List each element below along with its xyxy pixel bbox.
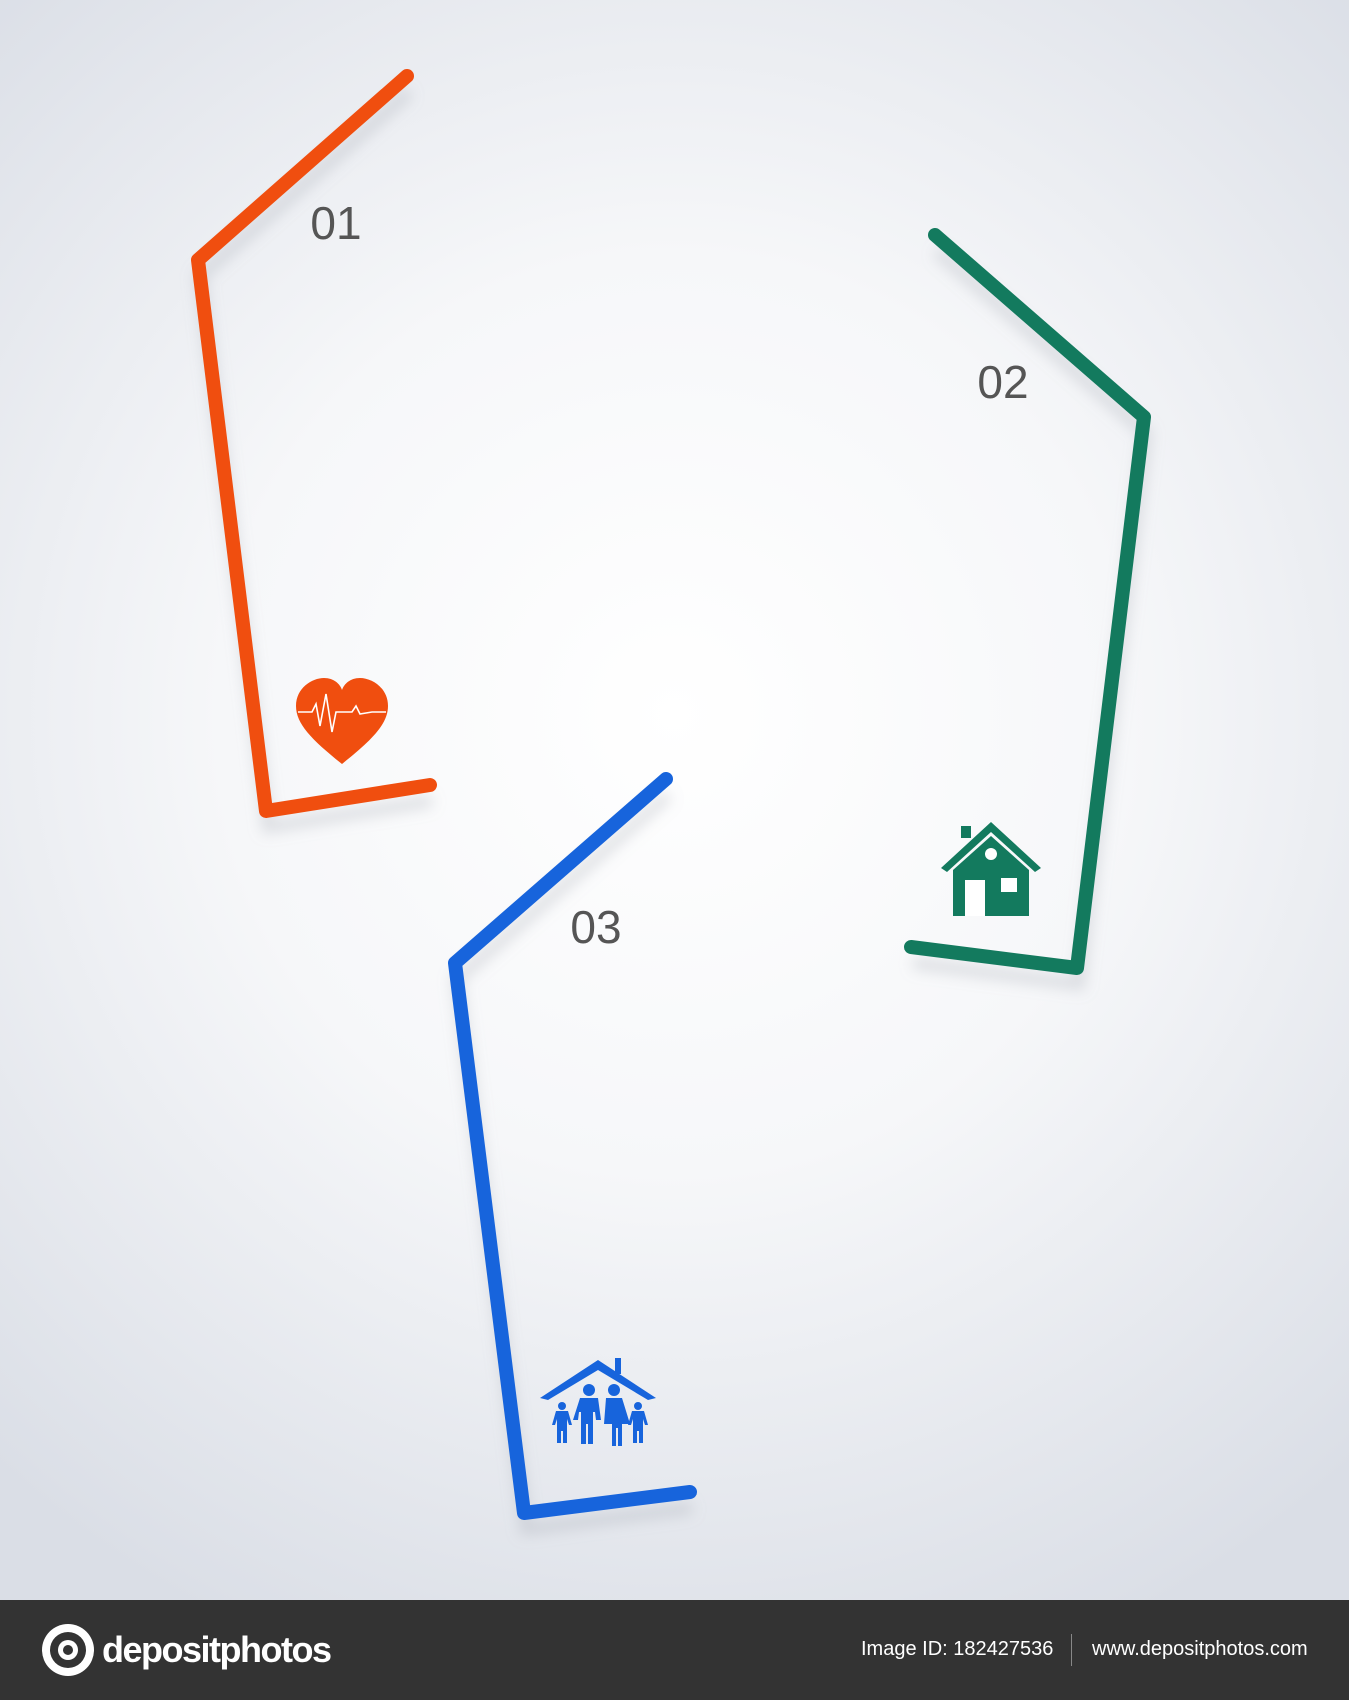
panel 02: green outline (911, 235, 1146, 984)
panel 01: orange outline (198, 76, 432, 827)
number 01: 01 (310, 197, 362, 249)
panel 03: blue outline (455, 779, 692, 1529)
footer bar (0, 1600, 1349, 1700)
icon: house (941, 822, 1041, 916)
number 03: 03 (570, 901, 622, 953)
number 02: 02 (977, 356, 1029, 408)
icon: heart with pulse (296, 678, 388, 764)
icon: family under roof (540, 1358, 656, 1446)
image id: Image ID: 182427536 (861, 1638, 1053, 1660)
logo (42, 1624, 331, 1676)
website: www.depositphotos.com (1092, 1638, 1308, 1660)
logo: depositphotos (102, 1629, 330, 1670)
